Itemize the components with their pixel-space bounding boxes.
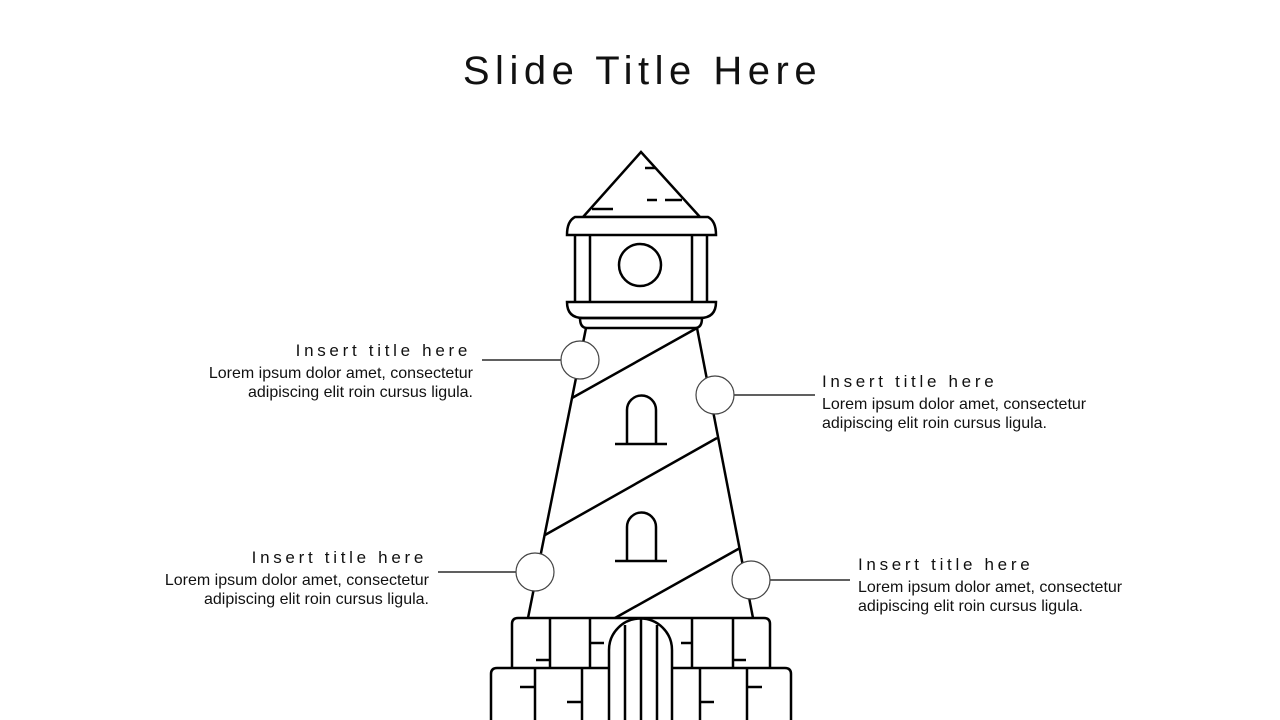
text block: top right: Insert title here bbox=[822, 372, 997, 391]
text block: top right bbox=[822, 372, 1086, 432]
text block: top left: adipiscing elit roin cursus ligula. bbox=[248, 384, 473, 401]
lantern room bbox=[567, 217, 716, 328]
text block: top left: Lorem ipsum dolor amet, consectetur bbox=[209, 365, 473, 382]
text block: bottom right: Lorem ipsum dolor amet, consectetur bbox=[858, 579, 1122, 596]
text block: bottom right bbox=[858, 555, 1122, 615]
text block: bottom left: Insert title here bbox=[252, 548, 427, 567]
text block: top right: adipiscing elit roin cursus ligula. bbox=[822, 415, 1047, 432]
base bbox=[491, 618, 791, 720]
text block: bottom left bbox=[165, 548, 429, 608]
connectors and markers bbox=[438, 341, 850, 599]
text block: top left: Insert title here bbox=[296, 341, 471, 360]
text block: bottom right: Insert title here bbox=[858, 555, 1033, 574]
title: Slide Title Here bbox=[463, 49, 822, 93]
text block: top left bbox=[209, 341, 473, 401]
text block: bottom right: adipiscing elit roin cursus ligula. bbox=[858, 598, 1083, 615]
roof bbox=[583, 152, 700, 217]
text block: bottom left: adipiscing elit roin cursus ligula. bbox=[204, 591, 429, 608]
text block: top right: Lorem ipsum dolor amet, consectetur bbox=[822, 396, 1086, 413]
tower bbox=[528, 328, 753, 618]
text block: bottom left: Lorem ipsum dolor amet, consectetur bbox=[165, 572, 429, 589]
